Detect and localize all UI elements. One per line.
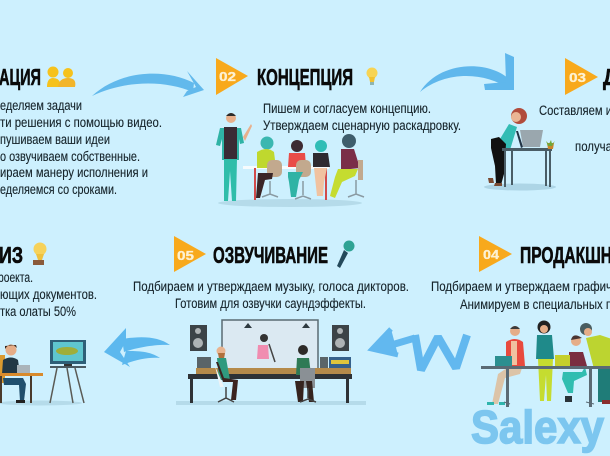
illustration: woman at desk [484,108,556,190]
step 06 text [0,270,97,319]
icon: trophy [33,242,46,265]
illustration: team meeting [216,113,364,207]
badge 02: 02 [219,70,236,84]
step 06 text: тка олаты 50% [0,304,76,319]
step 01 text [0,98,162,197]
arrow: 02 to 03 [420,53,514,92]
illustration: production team [481,320,610,407]
step 01 text: ти решения с помощью видео. [0,115,162,130]
step 02 text: Пишем и согласуем концепцию. [263,101,431,116]
step 02 text: Утверждаем сценарную раскадровку. [263,118,461,133]
badge 05 [174,236,206,272]
illustration: recording studio [176,320,366,405]
step 01 text: еделяемся со сроками. [0,182,117,197]
step 01 text: пушиваем ваши идеи [0,132,110,147]
arrow: 04 to 05 zigzag [372,329,467,370]
step 05 text: Готовим для озвучки саундэффекты. [175,296,366,311]
step 04 text [431,279,610,312]
step 06 text: ющих документов. [0,287,97,302]
badge 03 [565,58,598,95]
badge 04 [479,236,512,272]
badge 04: 04 [483,248,499,262]
icon: people [47,66,75,87]
icon: light bulb [366,68,378,85]
step 03 text [539,103,610,154]
step 02 heading: КОНЦЕПЦИЯ [257,64,353,90]
step 05 heading: ОЗВУЧИВАНИЕ [213,242,328,268]
badge 02 [216,58,248,95]
badge 05: 05 [177,249,194,263]
step 05 text: Подбираем и утверждаем музыку, голоса дикторов. [133,279,409,294]
step 01 text: о озвучиваем собственные. [0,149,140,164]
icon: microphone [337,240,354,268]
step 01 text: ираем манеру исполнения и [0,165,148,180]
arrow: 05 to 06 [104,328,170,367]
badge 03: 03 [569,71,586,85]
step 02 text [263,101,461,133]
illustration: editor at computer [0,340,86,406]
step 01 heading: АЦИЯ [0,64,41,90]
arrow: 01 to 02 [92,71,204,97]
step 05 text [133,279,409,311]
step 01 text: еделяем задачи [0,98,82,113]
